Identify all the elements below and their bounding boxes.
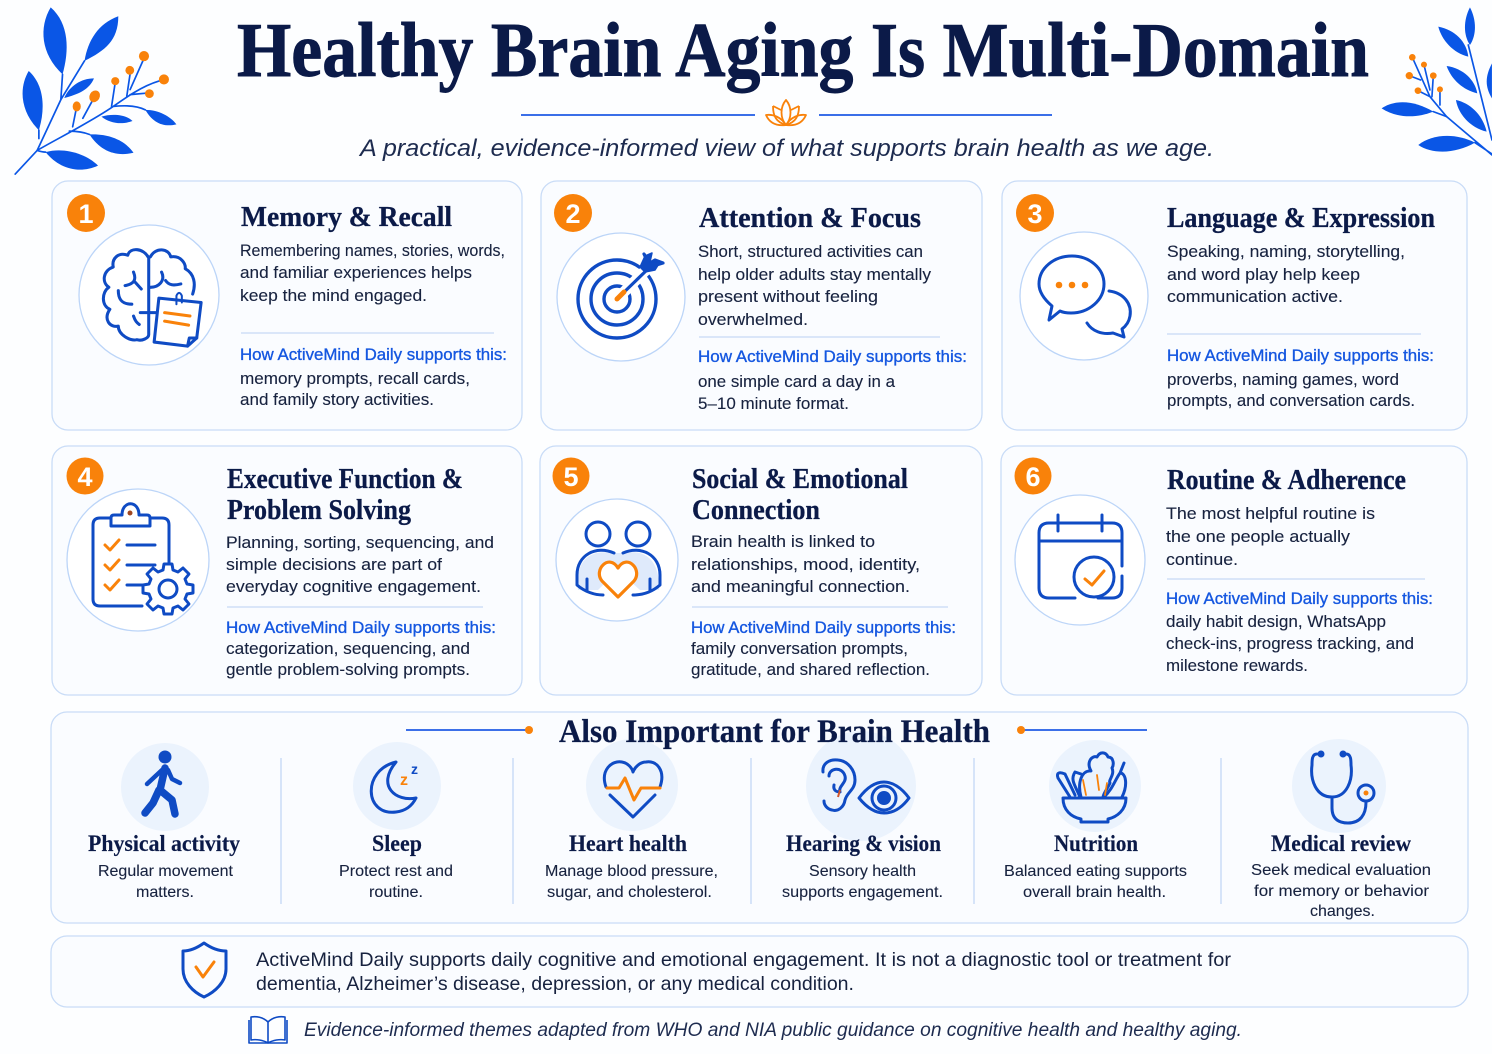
disclaimer text: ActiveMind Daily supports daily cognitive and emotional engagement. It is not a diagnostic tool or treatment for	[256, 949, 1232, 971]
icon: target with arrow	[557, 233, 685, 361]
item: medical review: changes.	[1310, 903, 1375, 920]
item: sleep: routine.	[369, 884, 423, 901]
heading: Routine & Adherence	[1167, 464, 1406, 496]
badge 6: 6	[1025, 462, 1041, 492]
title divider with lotus	[521, 100, 1052, 125]
icon: two people with heart	[556, 499, 678, 621]
panel: memory and recall	[52, 181, 522, 430]
badge 3: 3	[1027, 199, 1043, 229]
support text: daily habit design, WhatsApp	[1166, 612, 1386, 631]
description: Planning, sorting, sequencing, and	[226, 533, 494, 552]
heading: Social & Emotional	[692, 463, 908, 495]
heading: Language & Expression	[1167, 202, 1435, 234]
item: heart health	[545, 739, 718, 901]
icon: brain with note	[79, 225, 219, 365]
badge 5: 5	[563, 462, 579, 492]
description	[226, 533, 494, 596]
subtitle: A practical, evidence-informed view of what supports brain health as we age.	[358, 135, 1214, 162]
support text: categorization, sequencing, and	[226, 639, 470, 658]
item: hearing and vision: supports engagement.	[782, 884, 943, 901]
title: Healthy Brain Aging Is Multi-Domain	[237, 7, 1369, 93]
support text: memory prompts, recall cards,	[240, 369, 470, 388]
heading: Memory & Recall	[241, 201, 452, 233]
section heading	[406, 714, 1147, 750]
badge 6	[1014, 458, 1052, 494]
description	[698, 242, 932, 329]
heading	[692, 463, 908, 526]
item: medical review: Medical review	[1271, 831, 1411, 856]
item: sleep	[339, 742, 453, 901]
support text: gentle problem-solving prompts.	[226, 660, 470, 679]
item: heart health: sugar, and cholesterol.	[547, 884, 712, 901]
panel: social and emotional connection	[540, 446, 982, 695]
description: and familiar experiences helps	[240, 263, 472, 282]
description	[1167, 242, 1405, 306]
section heading: Also Important for Brain Health	[559, 714, 990, 750]
item: nutrition: Balanced eating supports	[1004, 863, 1187, 880]
badge 1	[67, 194, 105, 232]
support text	[226, 618, 496, 679]
support text: gratitude, and shared reflection.	[691, 660, 930, 679]
panel: attention and focus	[541, 181, 982, 430]
item: medical review: Seek medical evaluation	[1251, 862, 1431, 879]
heading: Problem Solving	[227, 494, 411, 526]
description: continue.	[1166, 550, 1238, 569]
support text: How ActiveMind Daily supports this:	[240, 345, 507, 364]
support text: How ActiveMind Daily supports this:	[1167, 346, 1434, 365]
support text: family conversation prompts,	[691, 639, 908, 658]
item: nutrition: Nutrition	[1054, 831, 1138, 856]
icon: calendar with check	[1015, 495, 1145, 625]
icon: moon with z letters	[371, 761, 418, 812]
item: physical activity: matters.	[136, 884, 194, 901]
support text: How ActiveMind Daily supports this:	[691, 618, 956, 637]
description	[240, 241, 505, 305]
item: hearing and vision: Sensory health	[809, 863, 916, 880]
icon: speech bubbles	[1020, 232, 1148, 360]
support text: one simple card a day in a	[698, 372, 896, 391]
support text	[698, 347, 967, 413]
description: Brain health is linked to	[691, 532, 875, 551]
description: communication active.	[1167, 287, 1343, 306]
description: Remembering names, stories, words,	[240, 241, 505, 260]
badge 2	[554, 194, 592, 232]
support text	[1166, 589, 1433, 675]
panel: routine and adherence	[1001, 446, 1467, 695]
badge 4: 4	[77, 462, 93, 492]
item: physical activity: Regular movement	[98, 863, 234, 880]
description: keep the mind engaged.	[240, 286, 427, 305]
footnote: Evidence-informed themes adapted from WHO and NIA public guidance on cognitive health and healthy aging.	[304, 1020, 1242, 1041]
support text: prompts, and conversation cards.	[1167, 391, 1415, 410]
support text: How ActiveMind Daily supports this:	[226, 618, 496, 637]
description: present without feeling	[698, 287, 878, 306]
description	[1166, 504, 1375, 569]
item: heart health: Manage blood pressure,	[545, 863, 718, 880]
panel: disclaimer	[51, 936, 1468, 1007]
item: physical activity: Physical activity	[88, 831, 240, 856]
icon: salad bowl	[1057, 753, 1126, 822]
panel: language and expression	[1002, 181, 1467, 430]
badge 4	[66, 458, 104, 494]
support text	[1167, 346, 1434, 410]
description: and word play help keep	[1167, 265, 1360, 284]
support text: and family story activities.	[240, 390, 434, 409]
support text: check-ins, progress tracking, and	[1166, 634, 1414, 653]
heading	[227, 463, 463, 526]
badge 3	[1016, 194, 1054, 232]
item: hearing and vision: Hearing & vision	[786, 831, 941, 856]
support text: How ActiveMind Daily supports this:	[698, 347, 967, 366]
icon: shield with check	[183, 943, 226, 997]
description: help older adults stay mentally	[698, 265, 932, 284]
description: Speaking, naming, storytelling,	[1167, 242, 1405, 261]
badge 1: 1	[78, 199, 94, 229]
item: physical activity	[88, 743, 240, 901]
description: the one people actually	[1166, 527, 1351, 546]
item: sleep: Protect rest and	[339, 863, 453, 880]
support text: 5–10 minute format.	[698, 394, 849, 413]
item: nutrition	[1004, 740, 1187, 901]
heading: Executive Function &	[227, 463, 463, 495]
panel: executive function	[52, 446, 522, 695]
description: relationships, mood, identity,	[691, 555, 920, 574]
icon: clipboard with gear	[67, 489, 209, 631]
icon: walking person	[145, 750, 180, 814]
badge 5	[552, 458, 590, 494]
description: Short, structured activities can	[698, 242, 923, 261]
icon: ear and eye	[823, 760, 909, 813]
item: hearing and vision	[782, 731, 943, 901]
disclaimer text: dementia, Alzheimer’s disease, depression, or any medical condition.	[256, 973, 854, 995]
item: nutrition: overall brain health.	[1023, 884, 1166, 901]
item: sleep: Sleep	[372, 831, 422, 856]
icon: stethoscope	[1312, 750, 1374, 823]
icon: moon with z letters: z	[400, 772, 408, 789]
icon: moon with z letters: z	[411, 761, 418, 777]
description	[691, 532, 920, 596]
item: medical review: for memory or behavior	[1254, 883, 1430, 900]
panel: also important	[51, 712, 1468, 923]
support text: proverbs, naming games, word	[1167, 370, 1399, 389]
support text	[691, 618, 956, 679]
support text	[240, 345, 507, 409]
heading: Connection	[692, 494, 820, 526]
description: simple decisions are part of	[226, 555, 442, 574]
badge 2: 2	[565, 199, 581, 229]
icon: heart with pulse	[604, 762, 662, 817]
support text: How ActiveMind Daily supports this:	[1166, 589, 1433, 608]
heading: Attention & Focus	[699, 202, 921, 234]
description: everyday cognitive engagement.	[226, 577, 481, 596]
description: The most helpful routine is	[1166, 504, 1375, 523]
disclaimer text	[256, 949, 1232, 995]
description: and meaningful connection.	[691, 577, 910, 596]
item: heart health: Heart health	[569, 831, 687, 856]
item: medical review	[1251, 739, 1431, 920]
description: overwhelmed.	[698, 310, 808, 329]
icon: open book	[249, 1017, 287, 1043]
support text: milestone rewards.	[1166, 656, 1308, 675]
icon: right leaf sprig	[1382, 7, 1492, 155]
icon: left leaf sprig	[15, 7, 176, 174]
